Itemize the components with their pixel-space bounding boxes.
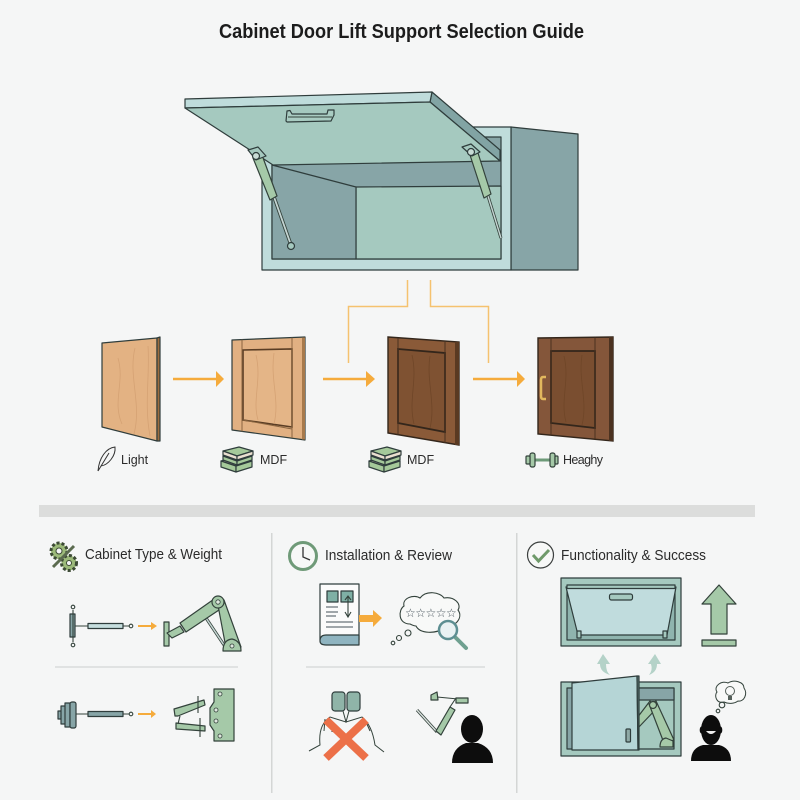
curved arrows up (597, 654, 661, 675)
icon: review thought cloud with stars: ☆☆☆☆☆ (405, 606, 456, 620)
arrow (323, 371, 375, 387)
icon: gears and wrench (51, 543, 76, 570)
section divider bar (39, 505, 755, 517)
arrow: big up with base (702, 585, 736, 646)
heading: Functionality & Success (561, 548, 706, 564)
right gas strut (462, 144, 501, 238)
door 3: MDF dark panel (388, 337, 459, 445)
door 2: MDF shaker panel (232, 337, 305, 440)
hinge bracket 2 (174, 689, 234, 741)
cabinet illustration with open lift door (185, 92, 578, 270)
arrow (173, 371, 224, 387)
icon: thought bubble with light bulb (716, 681, 746, 713)
icon: person silhouette (452, 715, 493, 763)
icon: clock (290, 542, 316, 570)
door 4: heavy panel with handle (538, 337, 613, 441)
label: MDF with books icon: MDF (407, 453, 434, 467)
label: MDF with books icon: MDF (260, 453, 287, 467)
icon: strut assembly (417, 692, 468, 735)
heading: Installation & Review (325, 548, 452, 564)
panel: cabinet type and weight (51, 543, 241, 741)
lift arm mechanism 1 (164, 596, 241, 651)
cabinet front frame (262, 127, 511, 270)
left gas strut (248, 147, 294, 250)
arrow (359, 610, 382, 627)
cabinet side (511, 127, 578, 270)
icon: smiling person silhouette (691, 715, 731, 761)
label: Heaghy with dumbbell icon (526, 453, 604, 467)
cabinet interior (272, 137, 501, 259)
label: MDF with books icon (369, 447, 434, 472)
label: MDF with books icon (221, 447, 287, 472)
door 1: light plain panel (102, 337, 160, 441)
arrow (138, 622, 157, 630)
strut diagram 2 (58, 702, 133, 728)
heading: Cabinet Type & Weight (85, 547, 222, 563)
lifted door (185, 92, 500, 165)
label: Light with feather icon: Light (121, 453, 149, 467)
strut diagram 1 (70, 605, 133, 647)
orange connector lines (348, 280, 488, 363)
panel: functionality and success (528, 542, 746, 761)
icon: check mark (528, 542, 554, 568)
icon: review thought cloud with stars (391, 593, 466, 648)
closed cabinet with door (561, 676, 681, 756)
arrow (473, 371, 525, 387)
icon: instruction manual (320, 584, 359, 645)
arrow (138, 710, 156, 718)
label: Light with feather icon (98, 447, 149, 471)
icon: hands with brackets crossed out (309, 692, 384, 758)
open cabinet top (561, 578, 681, 646)
panel: installation and review (290, 542, 493, 763)
title: Cabinet Door Lift Support Selection Guide (219, 21, 584, 43)
label: Heaghy with dumbbell icon: Heaghy (563, 453, 604, 467)
